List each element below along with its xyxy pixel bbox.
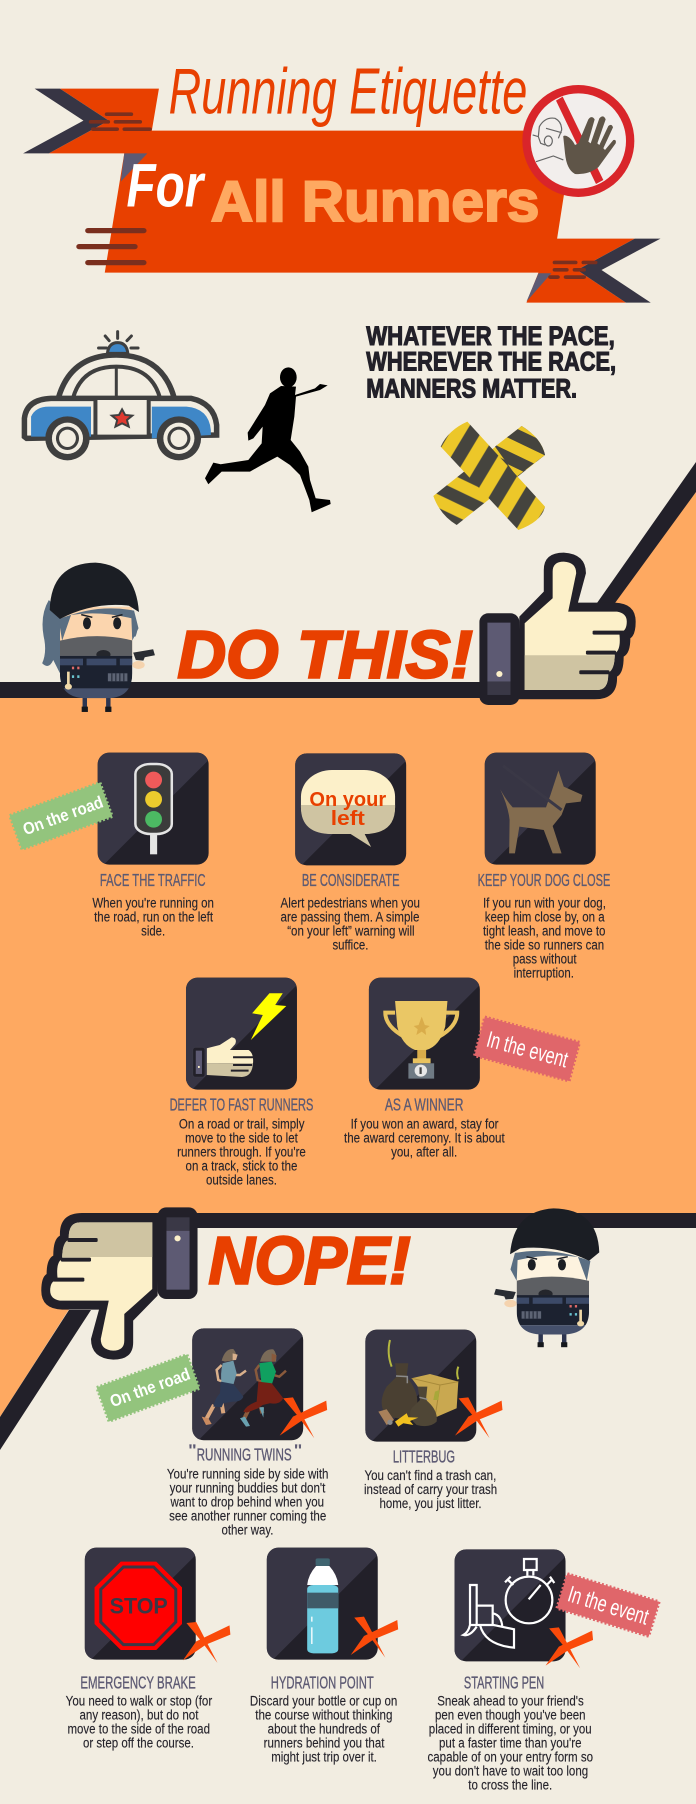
card: be considerate: Alert pedestrians when you bbox=[281, 896, 420, 911]
nope cards bottom row bbox=[66, 1548, 593, 1793]
tag: in the event: In the event bbox=[484, 1026, 571, 1073]
card: keep your dog close: interruption. bbox=[514, 966, 574, 981]
card: hydration point: the course without thinking bbox=[255, 1707, 392, 1723]
tag: in the event bbox=[474, 1017, 580, 1081]
card: keep your dog close: pass without bbox=[513, 952, 577, 967]
card: face the traffic bbox=[92, 753, 214, 939]
card: be considerate: are passing them. A simple bbox=[281, 910, 419, 925]
card: emergency brake: EMERGENCY BRAKE bbox=[80, 1673, 196, 1693]
card: defer to fast runners: runners through. If you're bbox=[177, 1144, 306, 1160]
horizontal bar bottom bbox=[190, 1213, 696, 1228]
card: running twins: " bbox=[294, 1441, 302, 1461]
card: keep your dog close: If you run with your dog, bbox=[483, 896, 606, 911]
character: cop right bbox=[494, 1208, 599, 1347]
card: starting pen: Sneak ahead to your friend's bbox=[437, 1693, 584, 1709]
heading: do this: DO THIS! bbox=[178, 617, 473, 692]
card: face the traffic: the road, run on the left bbox=[94, 910, 213, 925]
card: starting pen bbox=[427, 1549, 593, 1793]
card: starting pen: capable of on your entry form so bbox=[427, 1750, 593, 1765]
card: emergency brake bbox=[66, 1548, 230, 1751]
icon: runner silhouette bbox=[205, 367, 331, 512]
card: be considerate: On your bbox=[309, 788, 386, 810]
tagline bbox=[366, 321, 616, 403]
card: running twins: other way. bbox=[222, 1522, 273, 1538]
card: be considerate: BE CONSIDERATE bbox=[302, 871, 400, 890]
card: defer to fast runners bbox=[170, 978, 313, 1188]
card: as a winner: you, after all. bbox=[391, 1144, 457, 1160]
card: emergency brake: any reason), but do not bbox=[79, 1707, 199, 1723]
nope section top bbox=[41, 1207, 599, 1538]
card: running twins: want to drop behind when you bbox=[170, 1494, 324, 1510]
card: running twins: your running buddies but don't bbox=[170, 1480, 326, 1496]
card: defer to fast runners: on a track, stick to the bbox=[186, 1158, 297, 1174]
card: starting pen: to cross the line. bbox=[468, 1778, 552, 1793]
card: defer to fast runners: move to the side to let bbox=[185, 1130, 298, 1146]
card: running twins bbox=[167, 1328, 328, 1538]
card: running twins: see another runner coming the bbox=[169, 1508, 326, 1524]
orange section background bbox=[0, 492, 696, 1417]
card: running twins: RUNNING TWINS bbox=[197, 1445, 292, 1465]
horizontal bar top bbox=[0, 682, 500, 698]
card: keep your dog close: keep him close by, on a bbox=[485, 910, 605, 925]
heading: nope: NOPE! bbox=[209, 1223, 411, 1298]
card: hydration point bbox=[250, 1548, 398, 1765]
diagonal band bottom bbox=[0, 1310, 91, 1450]
card: running twins: " bbox=[189, 1441, 196, 1461]
card: starting pen: you don't have to wait too long bbox=[433, 1764, 588, 1779]
card: keep your dog close bbox=[478, 753, 610, 981]
card: be considerate bbox=[281, 753, 420, 953]
diagonal band top bbox=[597, 462, 696, 603]
tag: on the road 2 bbox=[97, 1355, 199, 1421]
tag: in the event 2 bbox=[557, 1574, 659, 1636]
card: as a winner: the award ceremony. It is about bbox=[344, 1130, 505, 1146]
card: face the traffic: side. bbox=[141, 924, 165, 939]
icon: no entry hand sign bbox=[522, 85, 634, 197]
title: all runners: All Runners bbox=[211, 170, 539, 234]
tag: on the road: On the road bbox=[20, 792, 106, 839]
card: keep your dog close: tight leash, and move to bbox=[483, 924, 605, 939]
character: cop left bbox=[42, 563, 155, 712]
card: emergency brake: You need to walk or stop (for bbox=[66, 1693, 213, 1709]
card: hydration point: might just trip over it. bbox=[271, 1750, 377, 1765]
card: litterbug: LITTERBUG bbox=[393, 1447, 455, 1467]
card: keep your dog close: the side so runners can bbox=[485, 938, 604, 953]
card: as a winner bbox=[344, 978, 505, 1160]
card: litterbug: home, you just litter. bbox=[380, 1496, 482, 1511]
card: face the traffic: When you're running on bbox=[92, 896, 214, 911]
icon: thumbs down bbox=[41, 1207, 198, 1360]
do this cards: DEFER TO FAST RUNNERS bbox=[170, 1095, 313, 1115]
card: be considerate: suffice. bbox=[332, 938, 368, 953]
card: be considerate: left bbox=[331, 807, 365, 829]
card: litterbug: You can't find a trash can, bbox=[364, 1468, 496, 1483]
card: as a winner: If you won an award, stay for bbox=[351, 1116, 499, 1132]
card: emergency brake: or step off the course. bbox=[83, 1736, 194, 1751]
card: running twins: You're running side by side with bbox=[167, 1466, 328, 1482]
card: emergency brake: STOP bbox=[110, 1595, 168, 1618]
tag: on the road bbox=[10, 783, 112, 849]
card: hydration point: HYDRATION POINT bbox=[271, 1673, 374, 1693]
card: hydration point: about the hundreds of bbox=[268, 1721, 380, 1737]
card: hydration point: runners behind you that bbox=[264, 1736, 385, 1751]
icon: thumbs up bbox=[479, 553, 636, 705]
card: emergency brake: move to the side of the road bbox=[67, 1721, 210, 1737]
icon: caution tape cross bbox=[433, 422, 545, 530]
card: starting pen: put a faster time than you're bbox=[439, 1736, 582, 1751]
card: litterbug bbox=[364, 1330, 502, 1511]
card: litterbug: instead of carry your trash bbox=[364, 1482, 497, 1497]
card: face the traffic: FACE THE TRAFFIC bbox=[100, 871, 206, 890]
card: starting pen: placed in different timing, or you bbox=[429, 1721, 592, 1737]
card: hydration point: Discard your bottle or cup on bbox=[250, 1693, 397, 1709]
card: be considerate: “on your left” warning will bbox=[287, 924, 415, 939]
tag: on the road 2: On the road bbox=[107, 1364, 193, 1411]
card: starting pen: pen even though you've been bbox=[435, 1707, 586, 1723]
card: defer to fast runners: On a road or trail, simply bbox=[179, 1116, 305, 1132]
second row illustrations bbox=[24, 321, 636, 712]
card: starting pen: STARTING PEN bbox=[464, 1673, 544, 1693]
card: defer to fast runners: outside lanes. bbox=[206, 1173, 277, 1188]
title banner bbox=[23, 55, 661, 303]
icon: police car bbox=[24, 332, 217, 460]
tag: in the event 2: In the event bbox=[565, 1581, 652, 1630]
do this cards bbox=[92, 753, 610, 1188]
card: as a winner: AS A WINNER bbox=[385, 1095, 463, 1115]
title: for: For bbox=[127, 151, 206, 220]
